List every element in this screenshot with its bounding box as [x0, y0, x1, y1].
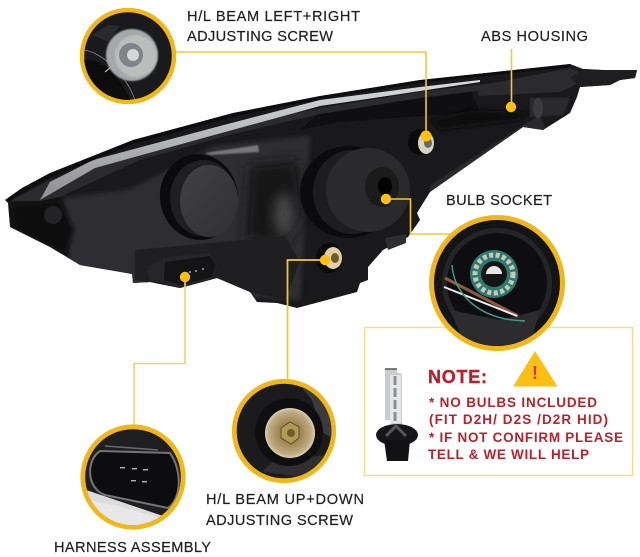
note text: TELL & WE WILL HELP [428, 447, 589, 462]
headlight assembly [5, 64, 637, 308]
inset: harness assembly [80, 427, 183, 530]
note heading: NOTE: [428, 367, 487, 387]
note text [428, 395, 623, 462]
label: up+down adjusting screw: H/L BEAM UP+DOWN [206, 492, 364, 508]
icon: warning triangle: ! [532, 363, 538, 383]
callout line: left+right screw [174, 52, 426, 136]
label: abs housing: ABS HOUSING [481, 29, 588, 45]
callout dot: left+right screw [420, 130, 432, 142]
callout dot: bulb socket [381, 194, 391, 204]
right vent detail [385, 234, 406, 250]
left bulb cap [154, 149, 244, 245]
lower adjusting screw [316, 243, 342, 273]
note text: (FIT D2H/ D2S /D2R HID) [429, 412, 608, 427]
mounting tab [570, 69, 637, 87]
callout dot: abs housing [506, 102, 516, 112]
note text: * NO BULBS INCLUDED [429, 395, 597, 410]
inset: bulb socket [432, 218, 562, 348]
label: up+down adjusting screw [206, 492, 364, 529]
label: left+right adjusting screw: ADJUSTING SCREW [187, 29, 333, 45]
connector [147, 253, 217, 288]
callout line: abs housing [510, 49, 512, 107]
right bulb socket [300, 146, 410, 238]
callout line: up+down screw [288, 260, 325, 380]
label: left+right adjusting screw [187, 9, 360, 45]
label: up+down adjusting screw: ADJUSTING SCREW [206, 513, 353, 529]
callout dot: up+down screw [320, 255, 330, 265]
note text: * IF NOT CONFIRM PLEASE [429, 430, 623, 445]
label: left+right adjusting screw: H/L BEAM LEFT+RIGHT [187, 9, 360, 25]
icon: warning triangle [513, 351, 558, 386]
note panel [364, 328, 632, 476]
callout dot: harness [180, 272, 190, 282]
housing shading [5, 64, 588, 300]
icon: HID bulb [376, 369, 418, 461]
callout line: bulb socket [386, 199, 452, 234]
inset: left+right adjusting screw [80, 10, 174, 104]
housing body [5, 64, 637, 308]
inset: up+down adjusting screw [234, 381, 335, 481]
upper adjusting screw [408, 129, 434, 155]
label: harness assembly: HARNESS ASSEMBLY [54, 540, 211, 556]
callout line: harness [134, 277, 185, 426]
label: bulb socket: BULB SOCKET [446, 193, 552, 209]
